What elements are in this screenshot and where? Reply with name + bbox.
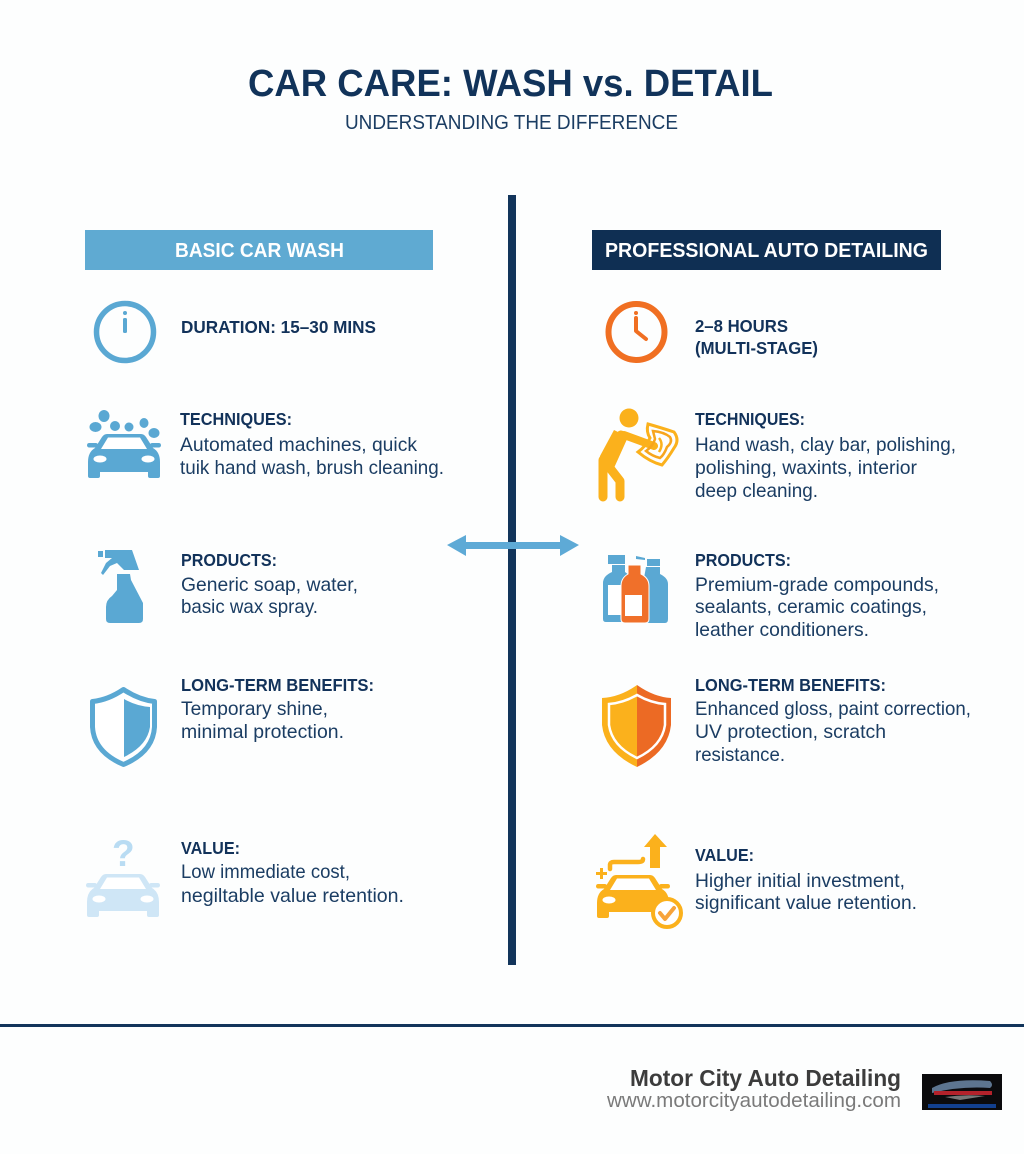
header: basic car wash [85, 230, 433, 270]
text: products [695, 550, 939, 641]
text: products: PRODUCTS: [695, 550, 791, 570]
panel: basic car wash [85, 230, 444, 917]
text: long-term benefits: minimal protection. [181, 721, 344, 743]
text: products: sealants, ceramic coatings, [695, 596, 927, 618]
text: products: basic wax spray. [181, 596, 318, 618]
text: duration [695, 316, 818, 358]
text: techniques: TECHNIQUES: [695, 409, 805, 429]
text: duration: 2–8 HOURS [695, 316, 788, 336]
text: long-term benefits: Temporary shine, [181, 698, 328, 720]
double-headed comparison arrow [447, 535, 579, 556]
text: long-term benefits [181, 675, 374, 743]
text: products: PRODUCTS: [181, 550, 277, 570]
icon: product bottles [603, 555, 668, 623]
text: long-term benefits: LONG-TERM BENEFITS: [181, 675, 374, 695]
icon: car wash with drops [87, 410, 161, 478]
text: products: Premium-grade compounds, [695, 574, 939, 596]
icon: spray bottle [98, 550, 143, 623]
text: value: VALUE: [181, 838, 240, 858]
icon: info clock [96, 304, 154, 360]
text: techniques: Hand wash, clay bar, polishing, [695, 434, 956, 456]
text: long-term benefits: Enhanced gloss, paint correction, [695, 698, 971, 720]
text: duration: DURATION: 15–30 MINS [181, 317, 376, 337]
text: value [181, 838, 404, 907]
text: techniques: tuik hand wash, brush cleaning. [180, 457, 444, 479]
text: techniques: TECHNIQUES: [180, 409, 292, 429]
text: products [181, 550, 358, 618]
text: techniques: deep cleaning. [695, 480, 818, 502]
header: professional auto detailing: PROFESSIONAL AUTO DETAILING [605, 240, 928, 262]
text: long-term benefits: LONG-TERM BENEFITS: [695, 675, 886, 695]
center divider [508, 195, 516, 965]
icon: faded car with question mark: ? [112, 833, 135, 874]
header: professional auto detailing [592, 230, 941, 270]
text: techniques: polishing, waxints, interior [695, 457, 917, 479]
subtitle: UNDERSTANDING THE DIFFERENCE [345, 112, 678, 134]
text: value: VALUE: [695, 845, 754, 865]
text: products: Generic soap, water, [181, 574, 358, 596]
icon: faded car with question mark [86, 833, 160, 917]
text: value: negiltable value retention. [181, 885, 404, 907]
logo [922, 1074, 1002, 1110]
text: long-term benefits [695, 675, 971, 766]
panel: professional auto detailing [592, 230, 971, 927]
text: value: Higher initial investment, [695, 870, 905, 892]
icon: person polishing [600, 408, 677, 497]
text: value: significant value retention. [695, 892, 917, 914]
icon: car with rising value [596, 834, 681, 927]
text: duration: (MULTI-STAGE) [695, 338, 818, 358]
footer brand name: Motor City Auto Detailing [630, 1065, 901, 1091]
text: value: Low immediate cost, [181, 861, 350, 883]
icon: premium shield [602, 685, 671, 767]
text: long-term benefits: resistance. [695, 744, 785, 766]
text: techniques [695, 409, 956, 502]
icon: half shield [92, 690, 154, 764]
text: techniques [180, 409, 444, 479]
header: basic car wash: BASIC CAR WASH [175, 240, 344, 262]
footer rule [0, 1024, 1024, 1027]
icon: clock [608, 304, 664, 360]
footer website: www.motorcityautodetailing.com [606, 1090, 901, 1112]
title: CAR CARE: WASH vs. DETAIL [248, 63, 773, 105]
text: long-term benefits: UV protection, scratch [695, 721, 886, 743]
text: techniques: Automated machines, quick [180, 434, 417, 456]
text: products: leather conditioners. [695, 619, 869, 641]
text: value [695, 845, 917, 914]
